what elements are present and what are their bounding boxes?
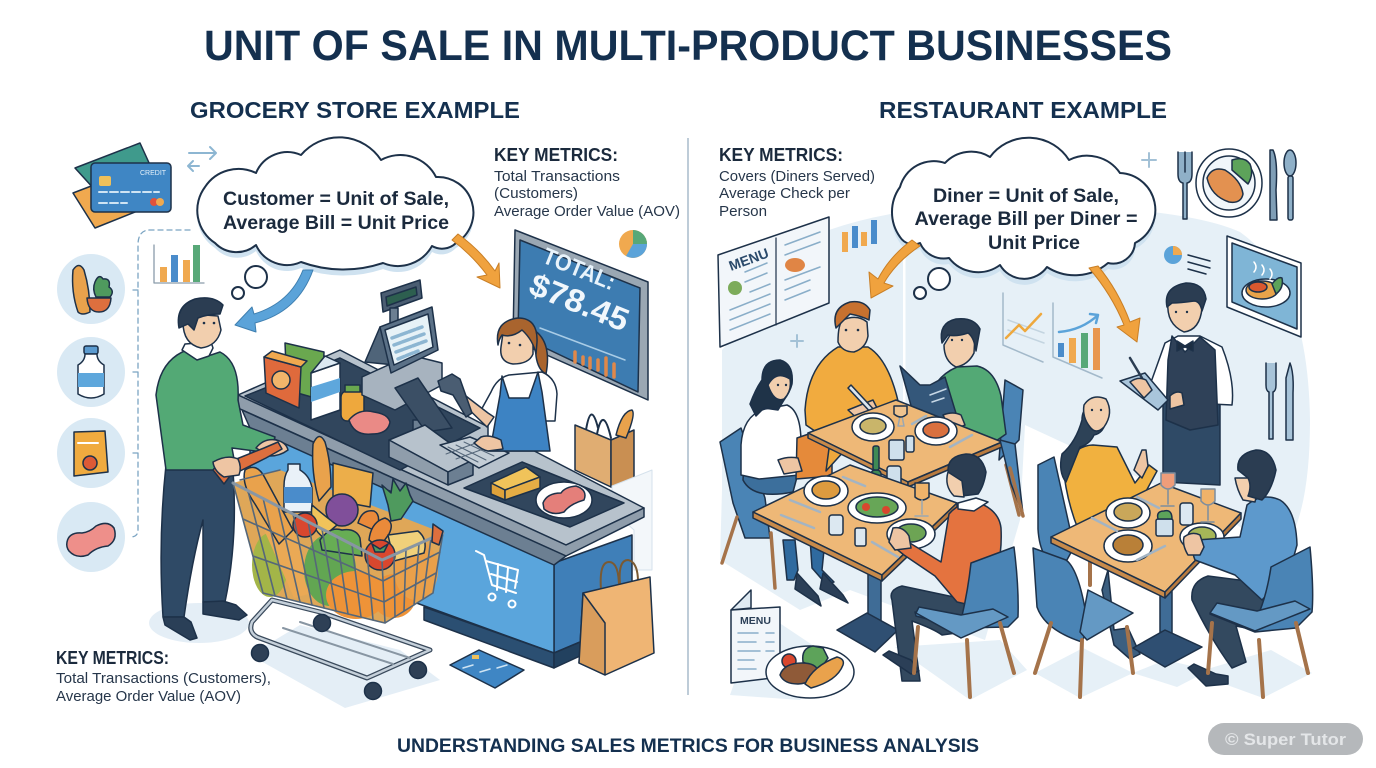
right table — [1051, 473, 1241, 667]
title: UNIT OF SALE IN MULTI-PRODUCT BUSINESSES — [204, 22, 1172, 70]
key metrics: top — [494, 145, 680, 220]
restaurant backdrop — [720, 205, 1312, 700]
customer — [156, 298, 288, 640]
thought cloud: customer: Customer = Unit of Sale, — [223, 188, 449, 210]
chair: centre front — [1033, 548, 1133, 697]
cart lower frame — [251, 600, 430, 678]
chart: bars with trend — [1053, 303, 1102, 378]
man in green sweater — [900, 319, 1006, 448]
icon: pie chart — [619, 230, 647, 258]
dashed bracket connector — [130, 230, 190, 537]
heading: grocery store example: GROCERY STORE EXAMPLE — [190, 97, 520, 123]
key metrics: bottom — [56, 648, 271, 705]
checkout counter — [238, 350, 644, 668]
chair: right of front table — [1000, 440, 1023, 516]
man in yellow sweater — [805, 302, 902, 438]
thought cloud: customer — [197, 137, 473, 299]
icon: milk bottle — [57, 337, 125, 407]
shelf behind counter — [612, 470, 652, 570]
arrow: cloud to display — [452, 234, 500, 288]
total display — [513, 230, 648, 400]
watermark — [1208, 723, 1363, 755]
rear table — [808, 400, 1002, 508]
chair: back left — [720, 428, 775, 588]
key metrics: bottom: Total Transactions (Customers), — [56, 670, 271, 687]
fork and knife lower right — [1266, 363, 1293, 440]
woman in white shirt — [741, 360, 848, 606]
chair: woman in yellow — [1038, 457, 1090, 585]
man in blue shirt — [1184, 450, 1297, 686]
man in orange sweater — [883, 454, 1001, 681]
cart handle — [213, 442, 282, 484]
credit card on floor — [450, 650, 524, 688]
cart wire mesh — [233, 470, 443, 623]
products on belt — [264, 343, 390, 434]
cart groceries — [233, 436, 443, 623]
waiter — [1120, 283, 1233, 485]
key metrics: restaurant: Average Check per — [719, 185, 850, 202]
total display: TOTAL: — [539, 243, 619, 295]
food on counter — [491, 467, 592, 518]
icon: plate and cutlery top — [1178, 149, 1296, 220]
key metrics: restaurant: KEY METRICS: — [719, 145, 843, 165]
front left table — [753, 465, 957, 652]
cart corner — [432, 524, 443, 545]
key metrics: restaurant — [719, 145, 875, 220]
panel: restaurant example — [718, 138, 1313, 700]
woman in yellow top — [1061, 397, 1157, 659]
chart: wall bars — [842, 220, 877, 252]
plate of food — [766, 646, 854, 698]
table menu card — [731, 590, 780, 683]
key metrics: top: Average Order Value (AOV) — [494, 203, 680, 220]
key metrics: bottom: KEY METRICS: — [56, 648, 169, 668]
heading: restaurant example: RESTAURANT EXAMPLE — [879, 97, 1167, 123]
icon: bread and salad — [57, 254, 125, 324]
floor shadow — [149, 603, 440, 708]
hand on handle — [213, 457, 240, 477]
wall art: plate of food — [1227, 236, 1301, 337]
thought cloud: diner: Average Bill per Diner = — [914, 208, 1138, 230]
thought cloud: customer: Average Bill = Unit Price — [223, 212, 449, 234]
chart: line chart — [1003, 293, 1044, 362]
table menu card: MENU — [740, 615, 771, 627]
key metrics: top: (Customers) — [494, 185, 578, 202]
total display: $78.45 — [524, 266, 634, 338]
thought cloud: diner — [892, 138, 1155, 299]
icon: cereal box — [57, 418, 125, 488]
POS terminal — [362, 280, 509, 485]
footer caption: UNDERSTANDING SALES METRICS FOR BUSINESS ANALYSIS — [397, 736, 979, 757]
shopping bag on floor — [579, 560, 654, 675]
key metrics: top: Total Transactions — [494, 168, 620, 185]
shopping cart — [213, 436, 443, 700]
chair: orange man — [914, 547, 1018, 697]
icon: credit cards: CREDIT — [140, 170, 167, 177]
wall menu — [718, 217, 829, 347]
key metrics: top: KEY METRICS: — [494, 145, 618, 165]
shopping bag behind counter — [575, 410, 634, 487]
chair: green man — [999, 380, 1023, 515]
arrow: cloud to customer — [235, 270, 313, 332]
icon: cart on counter — [476, 551, 518, 608]
arrow: cloud to waiter — [1089, 266, 1140, 342]
key metrics: restaurant: Covers (Diners Served) — [719, 168, 875, 185]
icon: steak — [57, 502, 125, 572]
icon: pie and lines — [1164, 246, 1210, 274]
panel: grocery store example — [56, 137, 680, 708]
key metrics: bottom: Average Order Value (AOV) — [56, 688, 241, 705]
cashier — [438, 318, 557, 451]
wall menu: MENU — [727, 245, 771, 274]
thought cloud: diner: Diner = Unit of Sale, — [933, 185, 1119, 207]
key metrics: restaurant: Person — [719, 203, 767, 220]
chart: small bar chart — [154, 245, 204, 283]
watermark: © Super Tutor — [1225, 731, 1347, 749]
icon: transfer arrows — [188, 147, 216, 171]
cart wheels — [252, 614, 426, 700]
arrow: cloud to diners — [869, 240, 920, 298]
plus marks — [791, 153, 1156, 347]
icon: credit cards — [73, 143, 171, 228]
thought cloud: diner: Unit Price — [988, 232, 1080, 254]
chair: right front — [1208, 547, 1313, 697]
